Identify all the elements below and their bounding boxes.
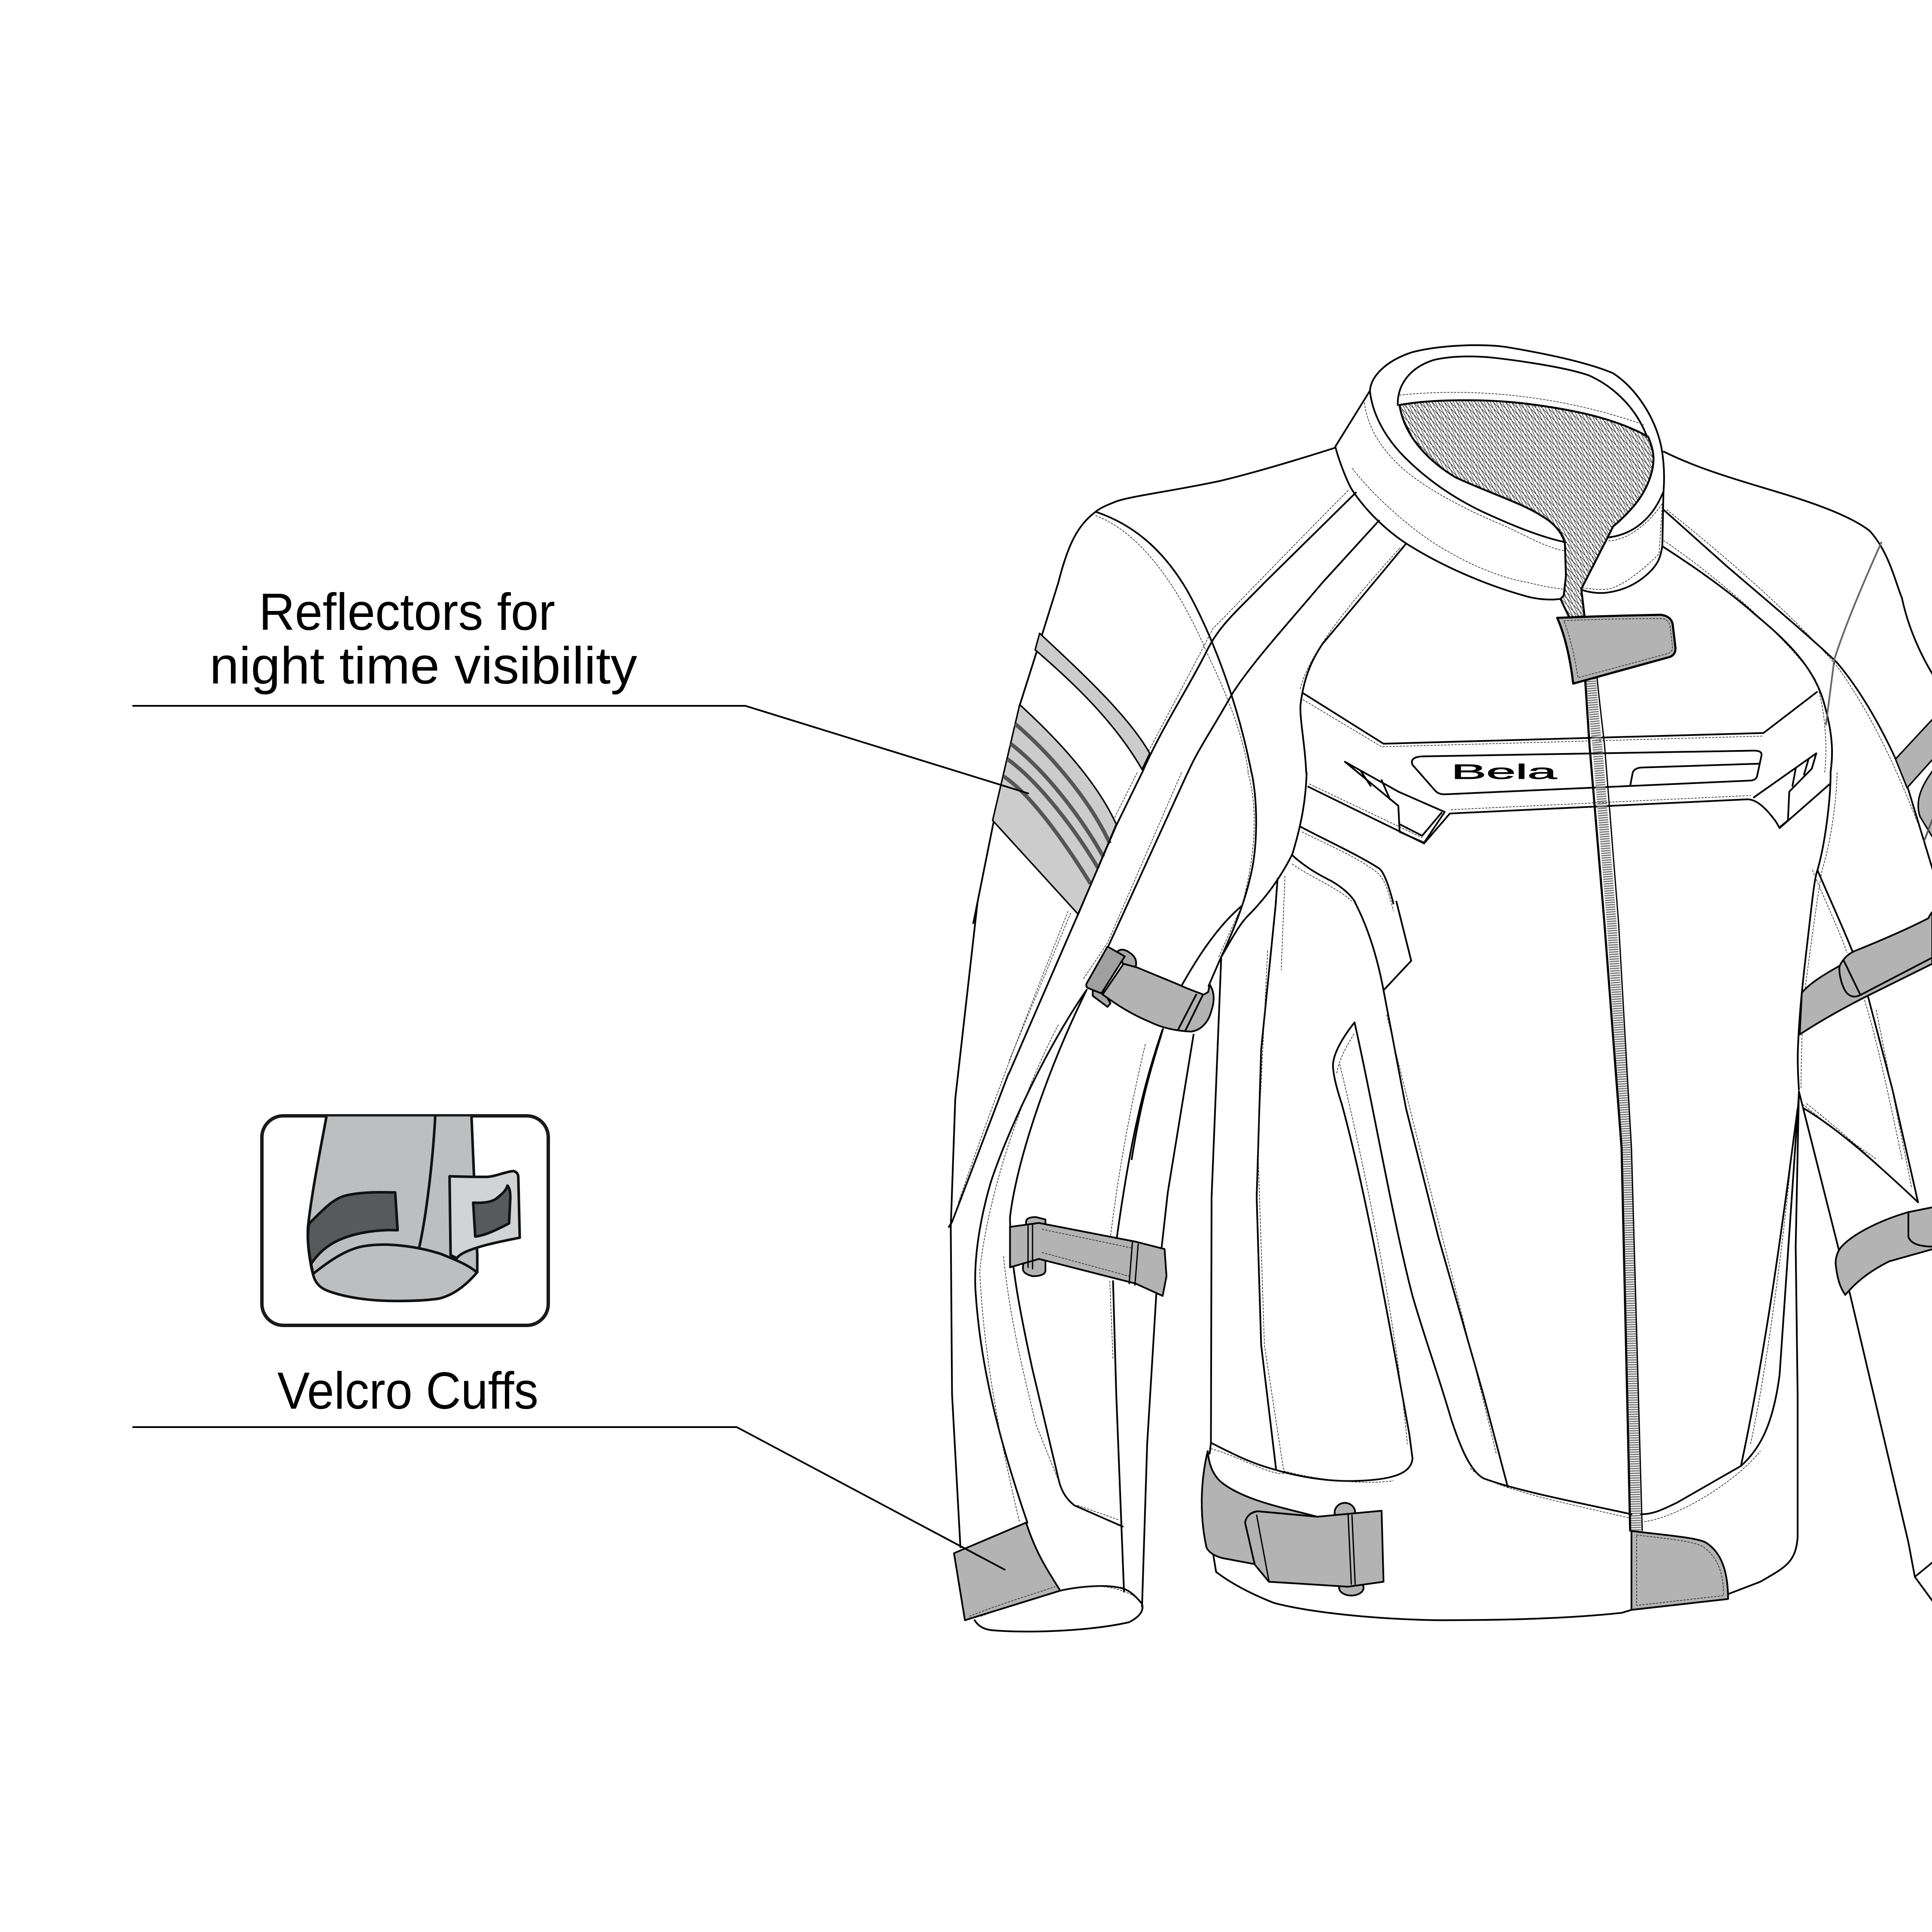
- front zip: [1585, 678, 1642, 1531]
- neck lining mesh: [1400, 400, 1653, 617]
- callout: velcro cuffs: [133, 1116, 1005, 1570]
- right sleeve lower linework: [1803, 997, 1902, 1159]
- strap: waist adjuster: [1202, 1451, 1383, 1595]
- hem tab: [1631, 1531, 1728, 1610]
- strap: right forearm: [1836, 1207, 1932, 1295]
- heading: reflectors: [210, 583, 637, 695]
- chest panel with logo: [1303, 692, 1830, 843]
- strap: left forearm: [1010, 1217, 1166, 1296]
- strap: right upper sleeve: [1800, 912, 1932, 1035]
- leader line: reflectors: [133, 706, 1028, 793]
- inset: velcro cuff detail: [262, 1116, 548, 1325]
- sleeve and waist straps: [954, 1207, 1932, 1620]
- collar zip tab: [1557, 615, 1676, 683]
- sleeve reflectors: [993, 633, 1932, 914]
- heading: reflectors: Reflectors for: [259, 583, 555, 641]
- right sleeve linework: [1798, 773, 1932, 1090]
- heading: velcro cuffs: Velcro Cuffs: [277, 1361, 538, 1420]
- strap: left upper sleeve: [1086, 947, 1214, 1032]
- lower sleeves: [949, 902, 1194, 1631]
- shoulders and upper sleeves: [973, 448, 1932, 923]
- leader line: velcro cuffs: [133, 1427, 1005, 1570]
- logo text: Bela: [1451, 761, 1557, 784]
- callout: reflectors: [133, 583, 1028, 793]
- heading: reflectors: night time visibility: [210, 636, 637, 695]
- collar: [1335, 345, 1664, 617]
- body panels: [1210, 902, 1932, 1620]
- velcro cuff: [954, 1522, 1060, 1620]
- pocket top: [1337, 1034, 1354, 1073]
- jacket illustration: [949, 345, 1932, 1631]
- elbow linework: [1009, 773, 1393, 1159]
